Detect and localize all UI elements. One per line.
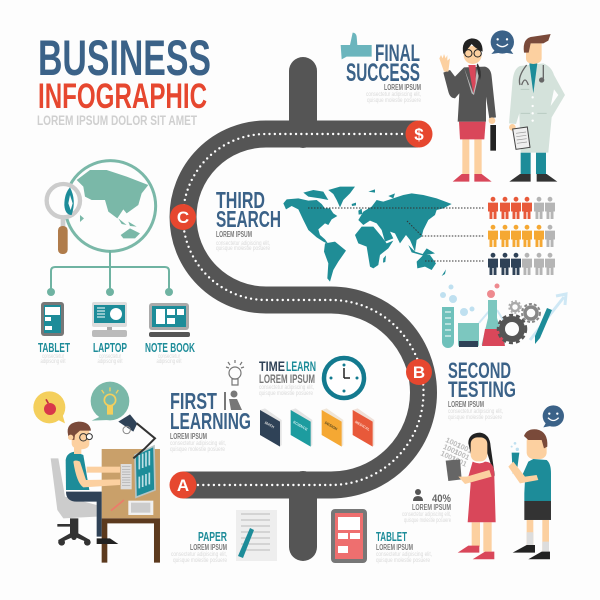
label: notebook: consectetur xyxy=(158,354,180,360)
heading: final success: consectetur adipiscing elit, xyxy=(366,92,421,98)
title: BUSINESS xyxy=(38,30,211,86)
label: notebook: adipiscing elit xyxy=(156,359,182,365)
icon: clock xyxy=(324,358,364,398)
heading: third search: consectetur adipiscing elit, xyxy=(216,241,270,247)
heading: time learn: LEARN xyxy=(286,358,316,374)
heading: first learning: LOREM IPSUM xyxy=(170,432,207,441)
heading: final success: LOREM IPSUM xyxy=(384,83,421,92)
label: laptop: LAPTOP xyxy=(93,340,127,355)
label: tablet: adipiscing elit xyxy=(40,359,66,365)
binary digits xyxy=(439,435,474,469)
heading: time learn xyxy=(259,358,316,397)
binary digits: 1001 xyxy=(452,447,471,462)
heading: second testing: LOREM IPSUM xyxy=(448,400,484,409)
doctor figure xyxy=(509,34,565,182)
icon: person reading xyxy=(224,390,242,410)
label: tablet xyxy=(376,529,432,564)
heading: first learning: FIRST xyxy=(170,388,217,414)
icon: light bulb xyxy=(226,360,244,385)
binary digits: 1001 xyxy=(450,454,468,469)
label: laptop xyxy=(93,340,127,365)
heading: second testing: consectetur adipiscing elit, xyxy=(448,409,503,415)
dollar-shaped road xyxy=(183,71,424,547)
books xyxy=(260,408,374,447)
binary digits: 1001 xyxy=(444,435,463,450)
label: laptop: consectetur xyxy=(99,354,121,360)
binary digits: 1001 xyxy=(442,442,460,457)
stat: 40 percent: LOREM IPSUM xyxy=(412,503,451,512)
connector tree xyxy=(47,250,173,296)
science icons xyxy=(440,284,566,348)
label: tablet: quisque molestie posuere xyxy=(376,558,431,564)
heading: first learning xyxy=(170,388,251,453)
stat: 40 percent: 40% xyxy=(432,493,451,505)
heading: final success: quisque molestie posuere xyxy=(367,98,422,104)
marker: C: C xyxy=(177,208,189,227)
speech bubble smile xyxy=(543,405,564,427)
heading: final success: SUCCESS xyxy=(346,59,420,87)
label: paper: consectetur adipiscing elit, xyxy=(171,552,227,558)
bubble: apple xyxy=(33,391,65,423)
label: paper: quisque molestie posuere xyxy=(173,558,228,564)
world map xyxy=(283,187,452,282)
stat: 40 percent: quisque molestie posuere xyxy=(404,518,451,524)
marker: A xyxy=(170,472,196,498)
icon: laptop xyxy=(92,302,127,337)
marker: B xyxy=(406,359,432,385)
title: LOREM IPSUM DOLOR SIT AMET xyxy=(37,113,198,128)
icon: magnifier xyxy=(47,184,80,254)
stat: 40 percent xyxy=(402,489,451,524)
binary digits: 1001 xyxy=(455,440,474,455)
people chart xyxy=(488,197,555,275)
title: INFOGRAPHIC xyxy=(38,77,207,116)
heading: time learn: TIME xyxy=(259,358,285,374)
girl with tablet xyxy=(439,433,496,559)
heading: time learn: quisque molestie posuere xyxy=(259,391,314,397)
heading: time learn: consectetur adipiscing elit, xyxy=(259,385,314,391)
label: tablet: consectetur adipiscing elit, xyxy=(376,552,432,558)
heading: first learning: quisque molestie posuere xyxy=(170,447,226,453)
label: laptop: adipiscing elit xyxy=(98,359,123,365)
label: notebook xyxy=(145,340,195,365)
book: science: SCIENCE xyxy=(292,420,309,432)
heading: second testing: quisque molestie posuere xyxy=(448,415,503,421)
heading: second testing: TESTING xyxy=(448,377,516,402)
marker: B: B xyxy=(413,363,425,382)
student at desk xyxy=(51,414,160,563)
label: tablet: TABLET xyxy=(376,529,407,544)
label: tablet: TABLET xyxy=(38,340,70,355)
dotted connectors xyxy=(308,208,484,261)
icon: red tablet xyxy=(331,509,367,563)
bubble: idea xyxy=(91,382,129,421)
label: notebook: NOTE BOOK xyxy=(145,340,195,355)
label: tablet: LOREM IPSUM xyxy=(376,543,413,552)
heading: third search: quisque molestie posuere xyxy=(216,246,271,252)
book: medical: MEDICAL xyxy=(354,420,371,432)
heading: third search xyxy=(216,187,281,252)
heading: third search: THIRD xyxy=(216,187,265,213)
icon: thumbs up xyxy=(341,33,372,59)
book: math: MATH xyxy=(264,421,275,430)
heading: third search: LOREM IPSUM xyxy=(216,230,252,239)
label: paper: PAPER xyxy=(198,529,227,544)
marker: dollar: $ xyxy=(414,125,424,144)
boy with test tube xyxy=(508,429,551,559)
marker: dollar xyxy=(406,120,432,148)
label: paper: LOREM IPSUM xyxy=(190,543,227,552)
stat: 40 percent: consectetur adipiscing elit, xyxy=(402,512,451,518)
heading: first learning: LEARNING xyxy=(170,408,251,434)
label: paper xyxy=(171,529,228,564)
heading: first learning: consectetur adipiscing elit, xyxy=(170,441,226,447)
heading: time learn: LOREM IPSUM xyxy=(259,372,315,386)
book: design: DESIGN xyxy=(324,421,338,431)
marker: C xyxy=(170,204,196,230)
binary digits: 1001 xyxy=(439,449,458,464)
heading: second testing xyxy=(448,358,516,421)
icon: paper and pencil xyxy=(236,510,277,561)
heading: second testing: SECOND xyxy=(448,358,511,383)
speech bubble smile xyxy=(491,30,514,54)
heading: final success: FINAL xyxy=(375,40,420,67)
title xyxy=(37,30,211,128)
heading: third search: SEARCH xyxy=(216,206,281,232)
heading: final success xyxy=(346,40,422,104)
marker: A: A xyxy=(177,476,189,495)
globe xyxy=(65,161,156,251)
label: tablet xyxy=(38,340,70,365)
label: tablet: consectetur xyxy=(42,354,64,360)
icon: tablet xyxy=(41,302,64,336)
woman figure xyxy=(439,38,496,182)
icon: notebook xyxy=(149,303,190,337)
